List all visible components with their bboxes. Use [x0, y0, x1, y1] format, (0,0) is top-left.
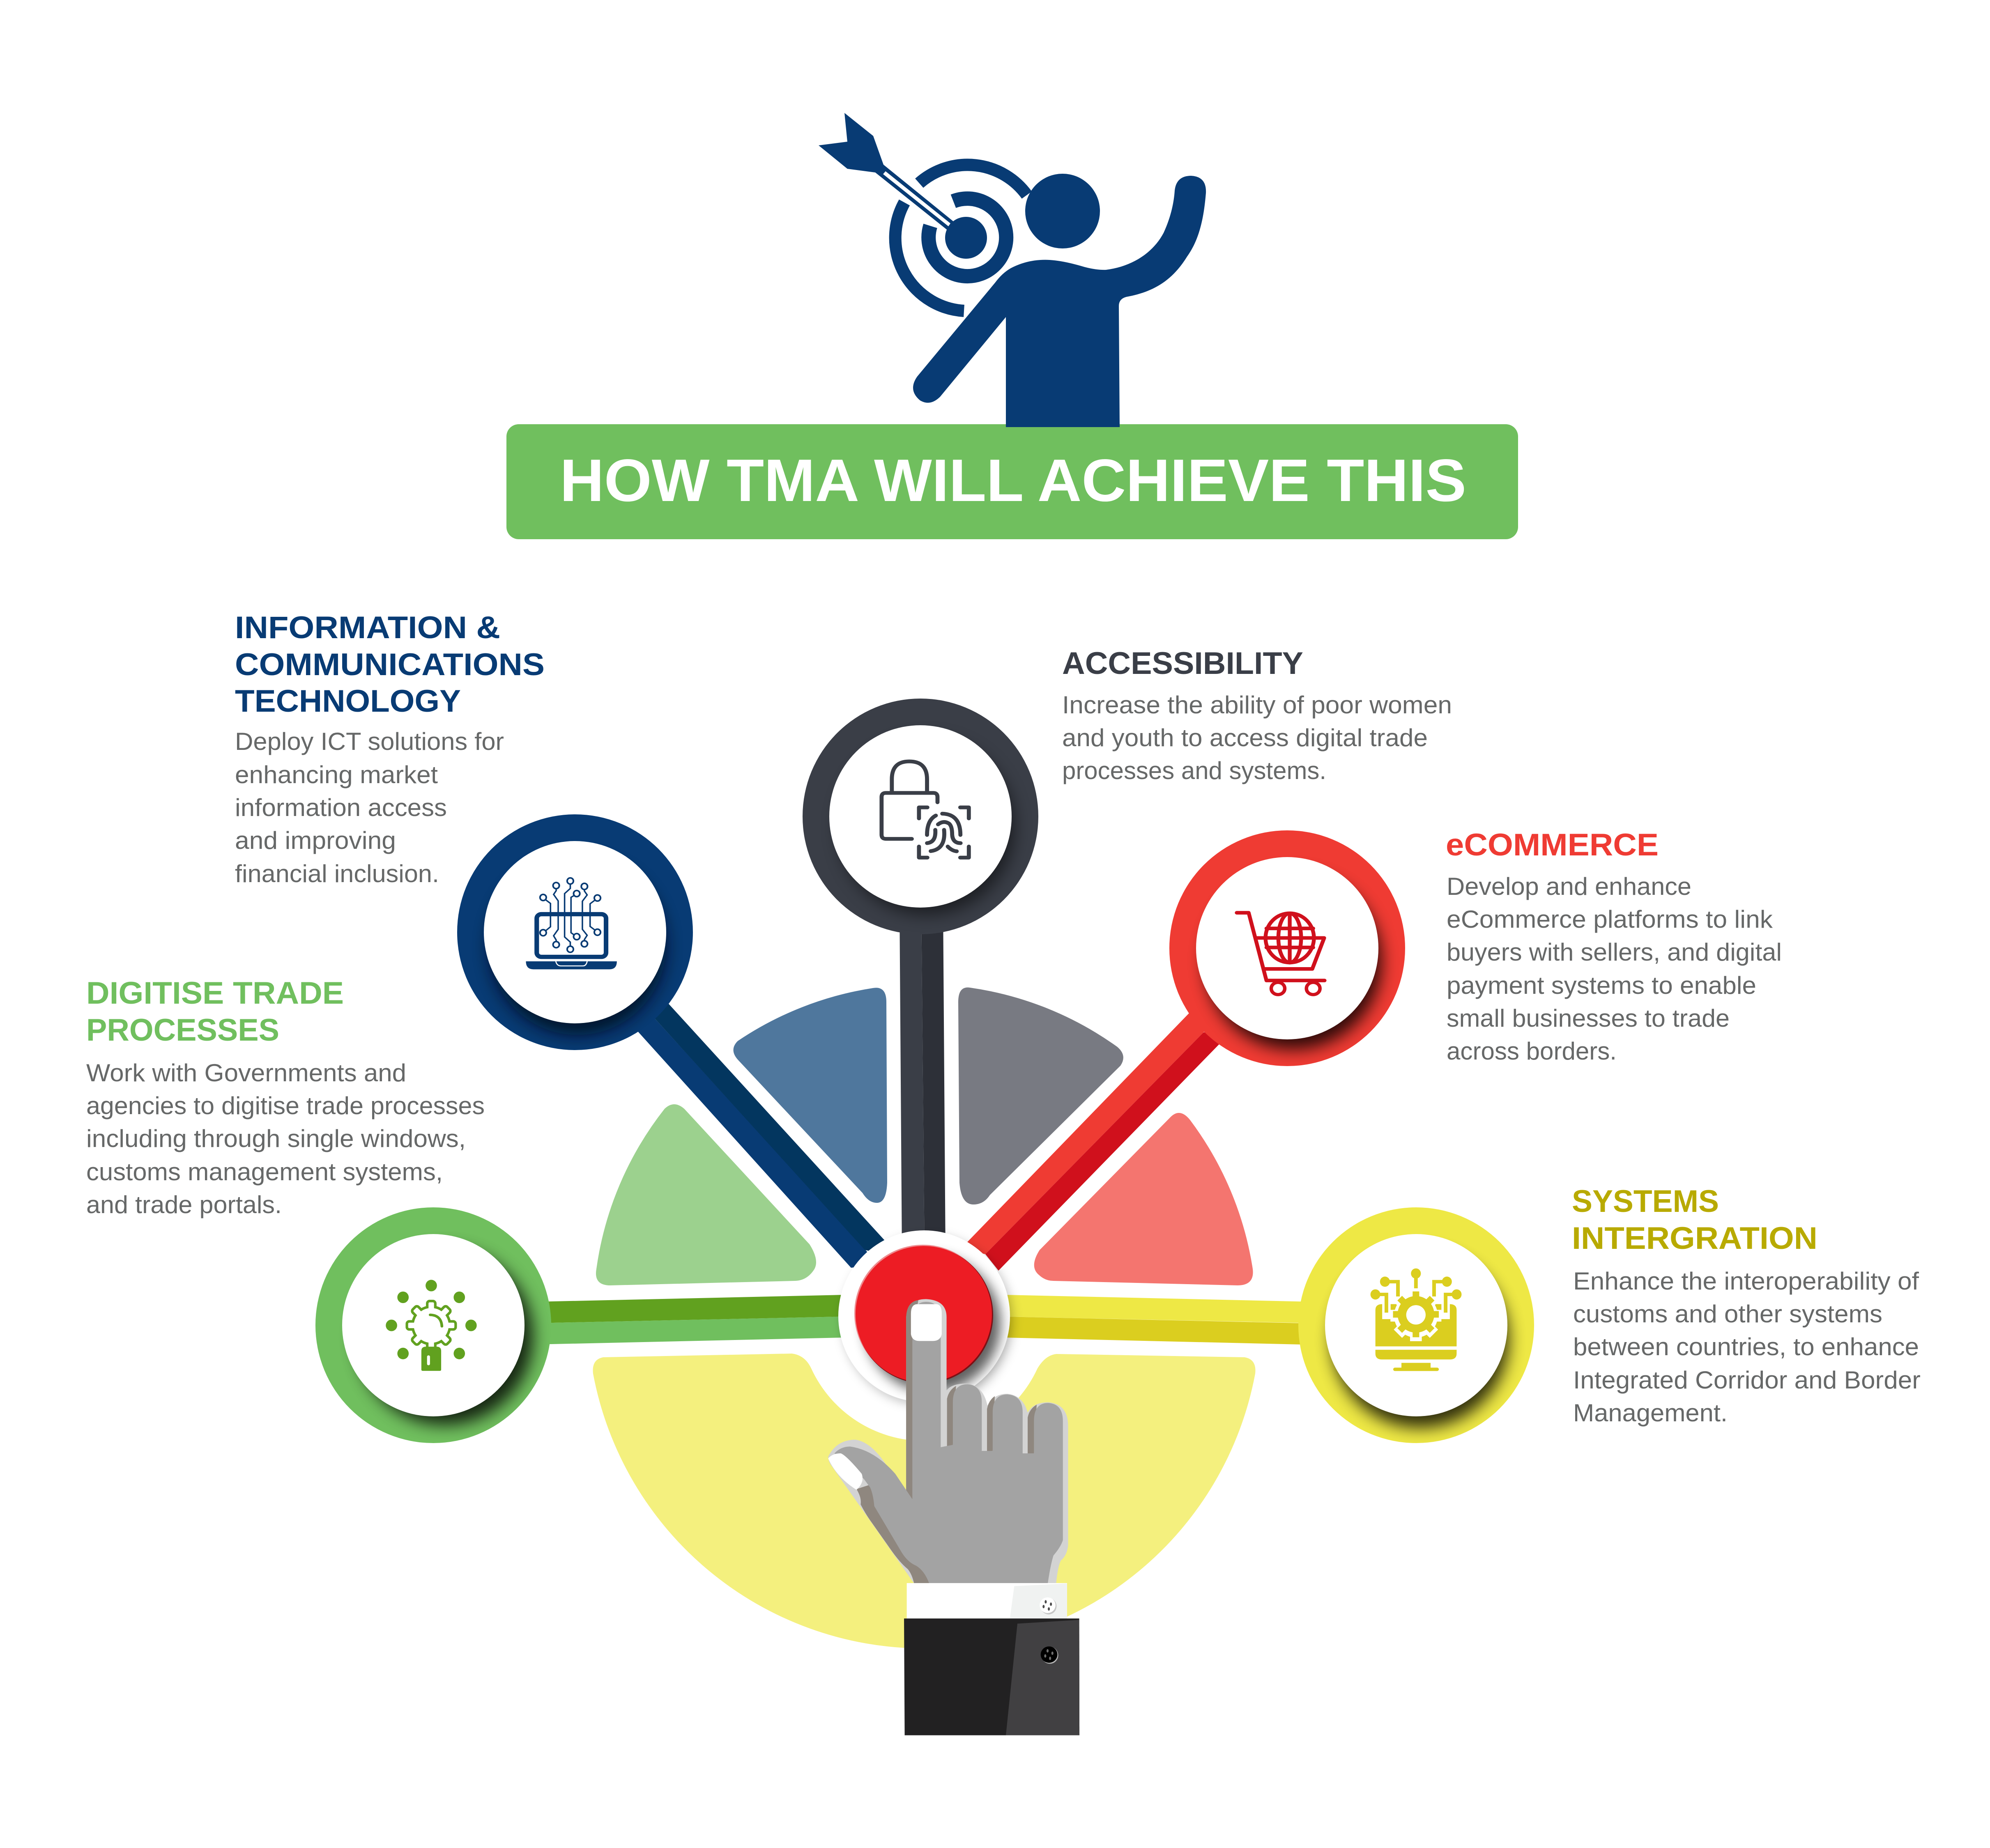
text block: information and communications technology: information access: [235, 794, 447, 821]
text block: information and communications technology: and improving: [235, 827, 396, 854]
panel: green sector: [596, 1104, 816, 1285]
text block: systems integration: INTERGRATION: [1572, 1221, 1817, 1256]
central red push button: [838, 1230, 1010, 1402]
text block: ecommerce: buyers with sellers, and digital: [1447, 938, 1782, 966]
hand fill: [835, 1302, 1063, 1584]
text block: ecommerce: Develop and enhance: [1447, 873, 1691, 900]
text block: digitise trade processes: [86, 976, 485, 1218]
panel: pink sector: [1034, 1113, 1253, 1285]
person figure: [913, 174, 1206, 427]
text block: accessibility: [1062, 646, 1452, 784]
hand pressing the button: [828, 1299, 1079, 1735]
text block: systems integration: between countries, to enhance: [1573, 1333, 1919, 1361]
text block: systems integration: customs and other systems: [1573, 1300, 1882, 1328]
text block: systems integration: Integrated Corridor and Border: [1573, 1366, 1921, 1394]
text block: ecommerce: payment systems to enable: [1447, 972, 1756, 999]
text block: systems integration: [1572, 1184, 1921, 1427]
text block: systems integration: Enhance the interoperability of: [1573, 1267, 1919, 1295]
connector: red bar: [961, 986, 1236, 1271]
text block: information and communications technology: enhancing market: [235, 761, 438, 788]
circle node: information and communications technology: [457, 814, 693, 1050]
text block: accessibility: ACCESSIBILITY: [1062, 646, 1303, 681]
shirt cuff: [907, 1583, 1067, 1619]
text block: digitise trade processes: PROCESSES: [86, 1013, 279, 1048]
text block: ecommerce: eCommerce platforms to link: [1447, 906, 1773, 933]
connector: yellow bar: [986, 1294, 1314, 1345]
hand shadow strips: [856, 1300, 1037, 1584]
connector: blue bar: [616, 973, 900, 1268]
text block: digitise trade processes: DIGITISE TRADE: [86, 976, 344, 1011]
icon: laptop with circuits: [526, 878, 617, 969]
text block: digitise trade processes: and trade portals.: [86, 1191, 282, 1218]
panel: grey sector: [958, 987, 1123, 1204]
text block: digitise trade processes: customs management systems,: [86, 1158, 443, 1186]
text block: systems integration: SYSTEMS: [1572, 1184, 1719, 1219]
text block: accessibility: Increase the ability of poor women: [1062, 691, 1452, 719]
circle node: accessibility: [803, 699, 1038, 934]
icon: shopping cart with globe: [1237, 913, 1325, 995]
text block: digitise trade processes: Work with Governments and: [86, 1059, 406, 1087]
jacket sleeve: [904, 1618, 1079, 1735]
circle node: ecommerce: [1169, 830, 1405, 1066]
icon: monitor with gear and circuits: [1371, 1269, 1461, 1371]
target rings: [895, 165, 1027, 311]
title banner: [506, 423, 1518, 539]
title banner: HOW TMA WILL ACHIEVE THIS: [560, 447, 1466, 514]
text block: ecommerce: eCOMMERCE: [1446, 827, 1659, 862]
text block: ecommerce: [1446, 827, 1782, 1065]
text block: information and communications technology: INFORMATION &: [235, 610, 500, 645]
circle node: digitise trade processes: [315, 1207, 551, 1443]
text block: information and communications technology: [235, 610, 545, 887]
circle node: systems integration: [1298, 1207, 1534, 1443]
text block: accessibility: and youth to access digital trade: [1062, 724, 1428, 752]
text block: information and communications technology: TECHNOLOGY: [235, 684, 461, 719]
icon: padlock with fingerprint: [881, 761, 969, 857]
fingernails: [828, 1304, 942, 1490]
text block: information and communications technology: Deploy ICT solutions for: [235, 728, 504, 755]
icon: person aiming at target with arrow: [819, 113, 1206, 427]
hand outline highlight: [828, 1299, 1068, 1584]
panel: yellow base sector: [593, 1354, 1255, 1648]
text block: systems integration: Management.: [1573, 1399, 1728, 1427]
text block: information and communications technology: financial inclusion.: [235, 860, 439, 887]
arrow: [819, 113, 953, 230]
connector: dark bar: [900, 903, 946, 1257]
panel: blue sector: [734, 988, 887, 1203]
text block: ecommerce: small businesses to trade: [1447, 1004, 1730, 1032]
text block: information and communications technology: COMMUNICATIONS: [235, 647, 545, 682]
text block: ecommerce: across borders.: [1447, 1037, 1617, 1065]
icon: gear with dots: [386, 1280, 477, 1371]
text block: digitise trade processes: agencies to digitise trade processes: [86, 1092, 485, 1119]
text block: accessibility: processes and systems.: [1062, 757, 1326, 784]
text block: digitise trade processes: including through single windows,: [86, 1125, 466, 1152]
connector: green bar: [534, 1294, 863, 1345]
